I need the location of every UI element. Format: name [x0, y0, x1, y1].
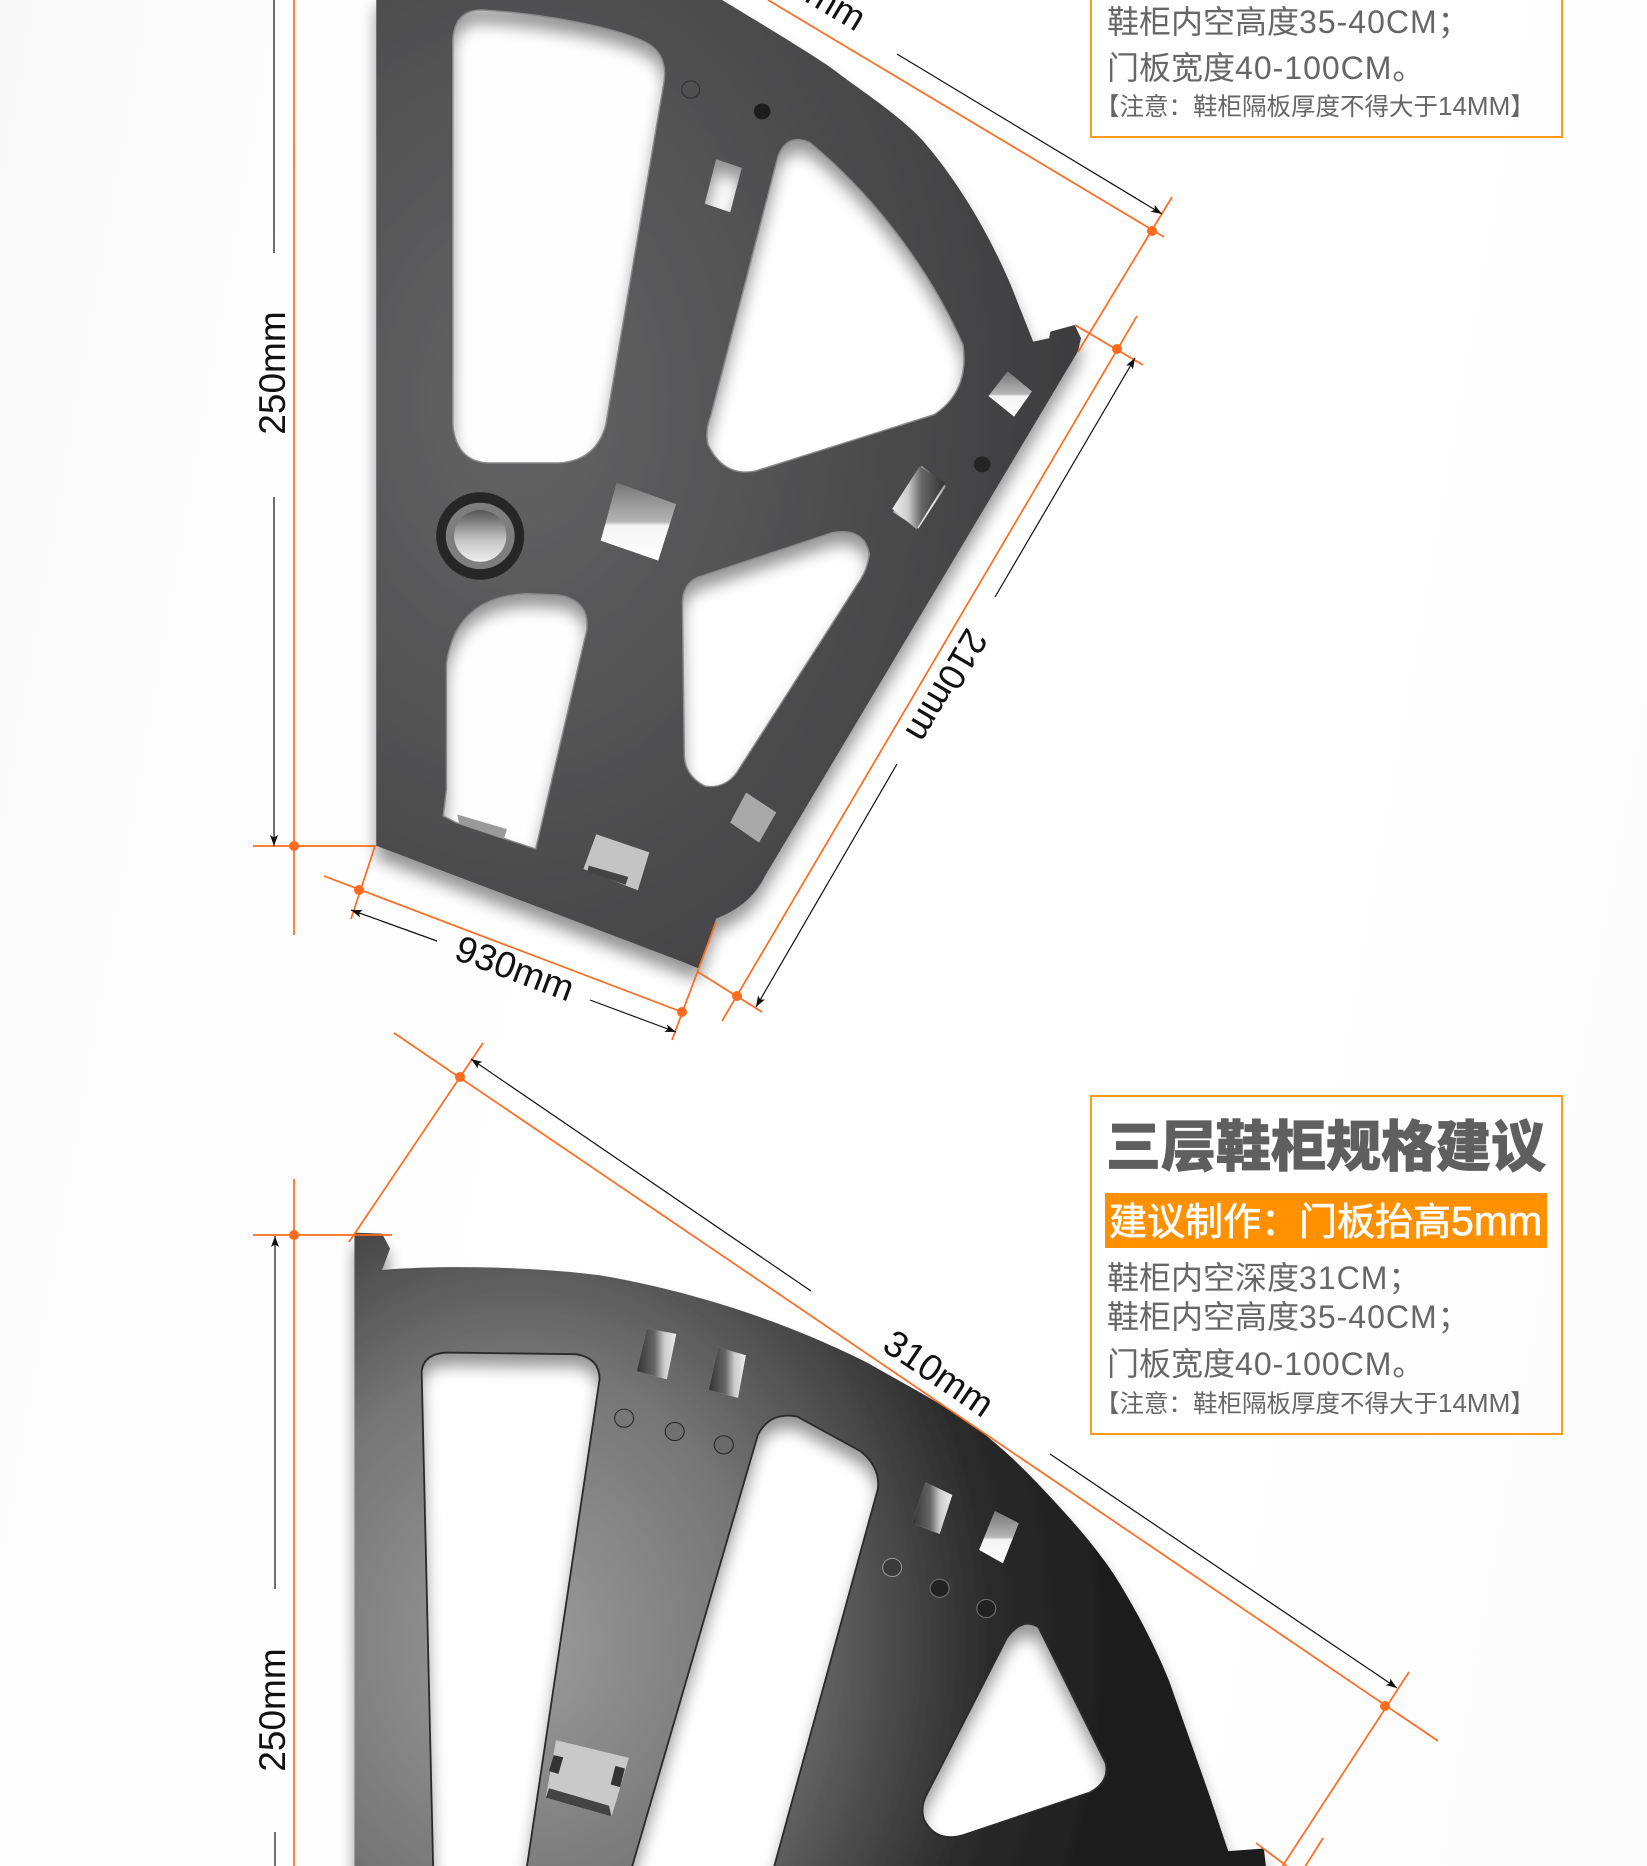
heading: three-layer spec: 三层鞋柜规格建议 [1106, 1116, 1546, 1178]
dimension lines: two-layer bracket [253, 0, 1172, 1040]
label: 210mm depth: 210mm [898, 622, 996, 749]
note: partition thickness: 【注意：鞋柜隔板厚度不得大于14MM】 [1095, 1388, 1535, 1418]
label: 250mm height, three-layer: 250mm [252, 1648, 293, 1772]
plate details: ring, rivet dots and slot interiors [436, 10, 1032, 890]
spec line: door width: 门板宽度40-100CM。 [1107, 50, 1424, 86]
label: 930mm width: 930mm [450, 928, 580, 1009]
spec line: door width: 门板宽度40-100CM。 [1107, 1346, 1424, 1382]
orange banner: door lift: 建议制作：门板抬高5mm [1109, 1198, 1542, 1244]
panel: three-layer bracket plate [354, 1233, 1268, 1866]
plate details: rivet holes and slot interiors [422, 1329, 1106, 1866]
panel: three-layer spec box [1090, 1095, 1563, 1435]
spec line: inner depth: 鞋柜内空深度31CM； [1107, 1260, 1420, 1296]
label: 250mm height, two-layer: 250mm [252, 311, 293, 435]
note: partition thickness: 【注意：鞋柜隔板厚度不得大于14MM】 [1095, 91, 1535, 121]
spec line: inner height: 鞋柜内空高度35-40CM； [1107, 1299, 1470, 1335]
panel: two-layer bracket plate [376, 0, 1081, 968]
spec line: inner height: 鞋柜内空高度35-40CM； [1107, 4, 1470, 40]
label: 310mm arc, three-layer: 310mm [876, 1322, 1001, 1425]
dimension lines: three-layer bracket [253, 1033, 1438, 1866]
panel: two-layer spec box (cropped at top) [1090, 0, 1563, 138]
